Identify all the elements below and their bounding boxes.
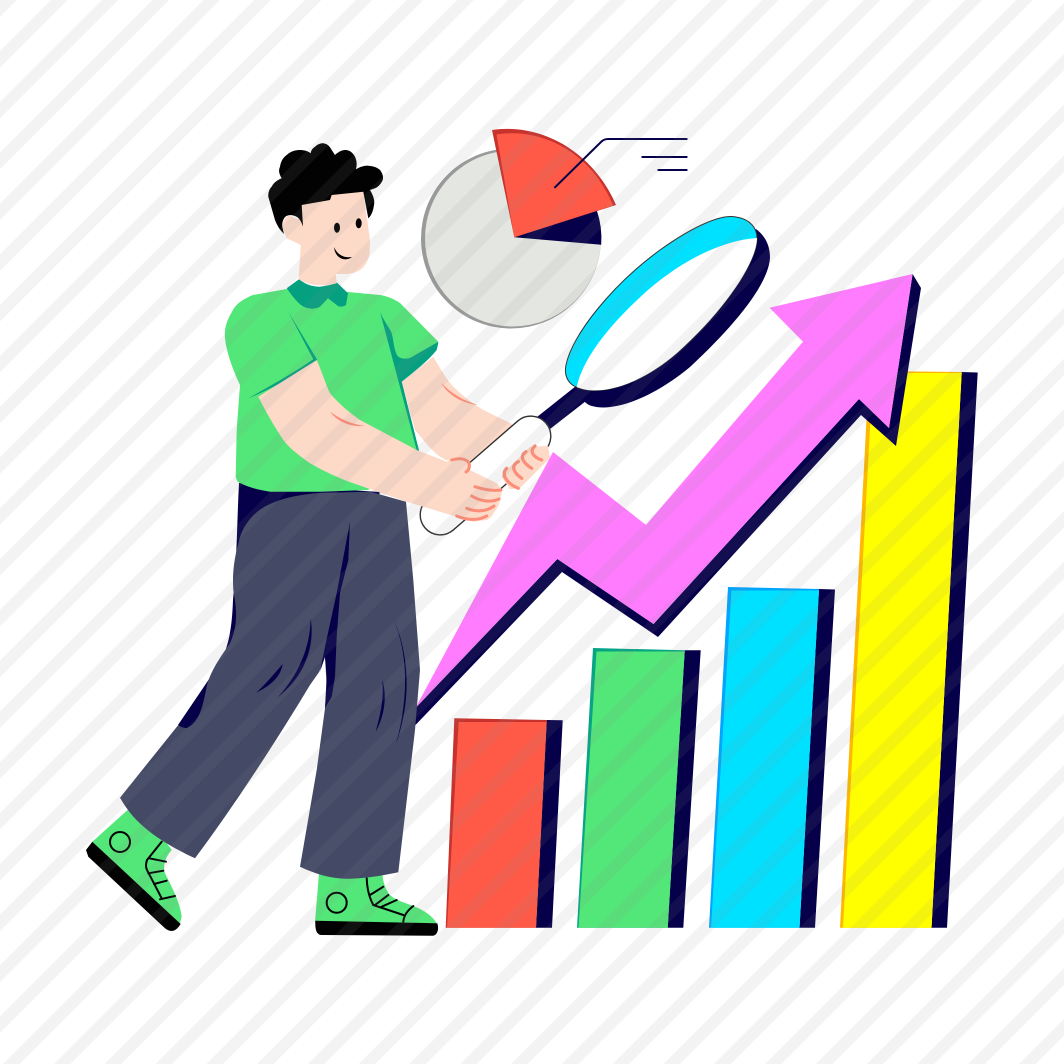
right arm	[402, 357, 512, 470]
bar: green	[577, 648, 701, 928]
right arm crease	[441, 383, 478, 405]
trousers wrinkles	[256, 618, 407, 744]
eyes	[334, 218, 362, 233]
trousers	[120, 483, 420, 879]
hair	[268, 143, 383, 234]
trousers legs	[120, 492, 420, 879]
right shoe laces	[367, 878, 413, 922]
magnifier grip	[412, 408, 559, 543]
smile	[334, 247, 352, 259]
right shoe	[315, 870, 438, 936]
magnifier handle shaft	[537, 386, 586, 429]
right hand fingers	[502, 446, 550, 489]
trousers shadow	[178, 483, 380, 729]
growth arrow	[416, 274, 921, 725]
bar: yellow	[840, 371, 978, 928]
bar: red	[446, 718, 563, 928]
bar chart	[446, 371, 978, 928]
trousers inseam	[320, 522, 350, 708]
neck and head	[268, 143, 383, 285]
pie chart	[421, 129, 687, 328]
left shoe sole	[86, 842, 181, 931]
left hand finger lines	[452, 459, 501, 519]
left shoe	[86, 809, 182, 931]
pie slice: navy	[514, 210, 601, 245]
magnifying glass	[412, 217, 770, 543]
magnifier rim shadow	[576, 229, 770, 407]
collar	[287, 279, 348, 309]
magnifier lens	[577, 238, 757, 390]
shirt left sleeve fold	[248, 312, 317, 398]
left shoe eyelet	[110, 832, 130, 852]
left shoe laces	[146, 842, 175, 899]
shirt	[225, 279, 438, 492]
pie callout lines	[555, 139, 687, 187]
left arm and hand	[258, 360, 502, 522]
right shoe eyelet	[327, 893, 347, 913]
pie slice: red	[492, 129, 616, 237]
left arm crease	[330, 412, 365, 426]
right shoe sole	[315, 921, 438, 936]
shirt right sleeve shadow	[380, 312, 438, 452]
bar: blue	[709, 587, 835, 928]
magnifier rim	[565, 217, 757, 390]
